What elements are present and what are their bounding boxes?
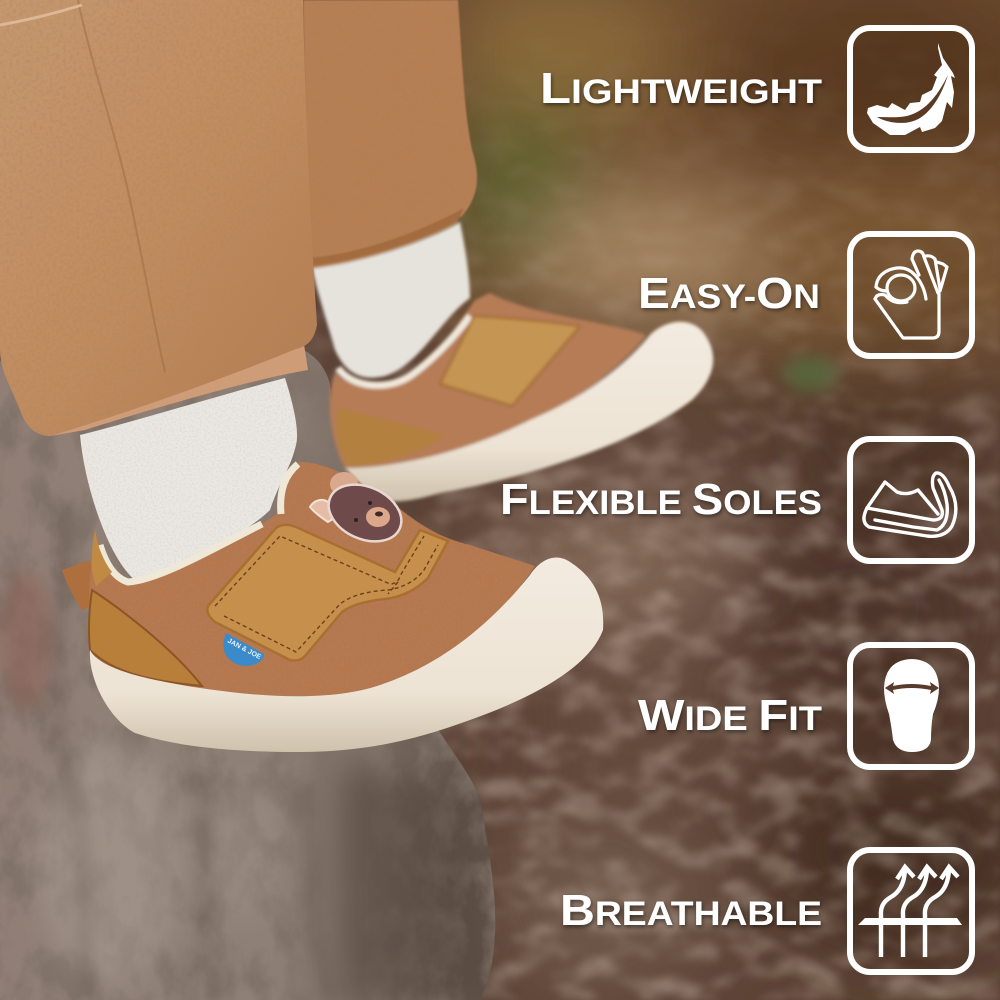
front shoe (62, 462, 603, 752)
label: Lightweight: LIGHTWEIGHT (540, 64, 822, 113)
blue tag: JAN & JOE (226, 638, 262, 661)
feature: Lightweight (540, 28, 972, 150)
label: Flexible Soles: FLEXIBLE SOLES (500, 475, 822, 524)
front leg trousers (0, 0, 317, 436)
feature: Breathable (560, 850, 972, 972)
back leg trousers (303, 0, 477, 270)
shoe upper mesh (89, 462, 535, 696)
back shoe sole (345, 322, 713, 501)
collar lining (100, 464, 298, 582)
front sock (80, 378, 297, 580)
back shoe strap (440, 316, 580, 406)
feature: Flexible Soles (500, 439, 972, 561)
trouser fleece (0, 0, 317, 436)
label: Wide Fit: WIDE FIT (638, 691, 822, 740)
back shoe upper (330, 293, 646, 468)
velcro strap (207, 525, 448, 660)
label: Easy-On: EASY-ON (638, 269, 820, 318)
rock (0, 347, 495, 1000)
feature: Wide Fit (638, 645, 972, 767)
icon: feather (850, 28, 972, 150)
front sole (90, 558, 603, 752)
icon: OK hand (850, 234, 972, 356)
back shoe (312, 222, 713, 501)
label: Breathable: BREATHABLE (560, 886, 822, 935)
icon: wide sole (850, 645, 972, 767)
back shoe heel (336, 408, 445, 466)
feature: Easy-On (638, 234, 972, 356)
cuff lining (50, 344, 308, 436)
back shoe collar (338, 316, 470, 385)
heel tab (62, 560, 96, 610)
icon: air flow (850, 850, 972, 972)
bear badge (310, 472, 410, 552)
icon: flexible shoe (850, 439, 972, 561)
heel leather (89, 590, 202, 686)
blue tag (223, 633, 264, 666)
back sock (312, 222, 470, 378)
